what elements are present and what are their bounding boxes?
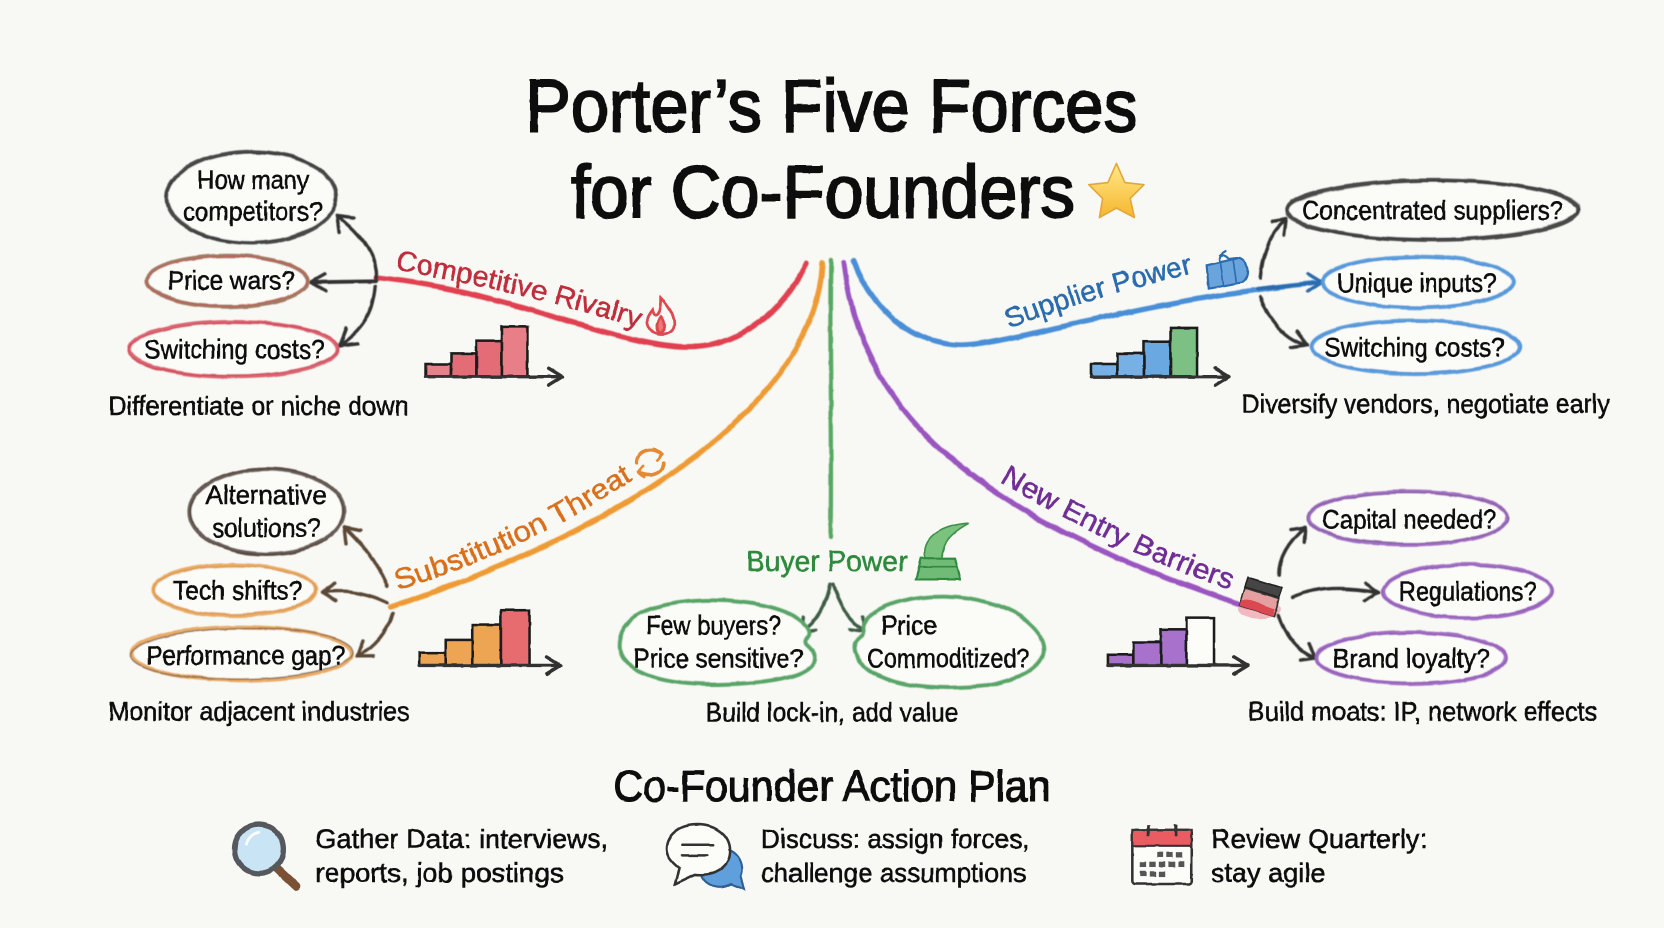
question: alternative solutions — [206, 480, 327, 543]
question: performance gap: Performance gap? — [146, 640, 345, 670]
text: review quarterly: stay agile — [1211, 858, 1325, 888]
title — [525, 65, 1138, 234]
icon: star — [1089, 163, 1144, 218]
oval: tech shifts — [154, 565, 315, 616]
oval: concentrated suppliers — [1286, 179, 1580, 241]
question: switching costs: Switching costs? — [144, 335, 325, 365]
question: alternative solutions: solutions? — [212, 513, 320, 543]
icon: plant tray — [916, 523, 969, 579]
text: review quarterly — [1211, 824, 1427, 888]
force: competitive rivalry — [108, 149, 810, 421]
action: gather data — [235, 824, 608, 888]
question: capital needed: Capital needed? — [1322, 504, 1496, 534]
branch line: buyer — [830, 260, 832, 536]
text: gather data: reports, job postings — [315, 858, 564, 888]
oval: alternative solutions — [188, 469, 345, 554]
question: how many competitors: How many — [197, 165, 309, 195]
branch line: substitution — [391, 263, 822, 607]
question: price wars: Price wars? — [168, 266, 295, 296]
icon: flame — [647, 298, 674, 334]
question: price commoditized: Commoditized? — [867, 644, 1029, 674]
arrows: new entry questions — [1279, 527, 1380, 660]
bar chart: substitution — [419, 610, 560, 674]
question: tech shifts: Tech shifts? — [173, 576, 302, 606]
force: new entry barriers — [840, 259, 1597, 727]
label: substitution threat: Substitution Threat — [395, 466, 634, 589]
question: alternative solutions: Alternative — [206, 480, 327, 510]
branch line: supplier — [854, 261, 1321, 345]
title: Porter’s Five Forces — [525, 65, 1138, 148]
title: for Co-Founders — [571, 151, 1075, 234]
oval: brand loyalty — [1316, 632, 1507, 683]
blob: price commoditized — [855, 596, 1044, 687]
oval: unique inputs — [1321, 257, 1514, 308]
bar chart: supplier — [1091, 328, 1229, 385]
oval: capital needed — [1307, 491, 1509, 544]
force: supplier power — [850, 177, 1611, 419]
advice: buyer: Build lock-in, add value — [706, 698, 958, 728]
oval: switching costs — [128, 321, 339, 378]
advice: substitution: Monitor adjacent industries — [108, 697, 410, 727]
question: how many competitors: competitors? — [183, 197, 323, 227]
question: few buyers: Price sensitive? — [634, 644, 803, 674]
question: few buyers: Few buyers? — [646, 611, 781, 641]
oval: switching costs — [1311, 320, 1521, 374]
text: discuss: challenge assumptions — [761, 858, 1026, 888]
advice: rivalry: Differentiate or niche down — [108, 391, 409, 421]
advice: new entry: Build moats: IP, network effects — [1248, 697, 1597, 727]
arrows: supplier questions — [1260, 220, 1321, 347]
arrows: substitution questions — [322, 527, 393, 656]
oval: regulations — [1383, 565, 1553, 618]
question: few buyers — [634, 611, 803, 674]
icon: magnifier — [235, 825, 296, 886]
text: review quarterly: Review Quarterly: — [1211, 824, 1427, 854]
label: new entry barriers: New Entry Barriers — [1000, 465, 1234, 588]
text: discuss — [761, 824, 1029, 888]
action: discuss — [666, 824, 1029, 889]
blob: few buyers — [620, 600, 814, 684]
question: switching costs: Switching costs? — [1324, 333, 1505, 363]
action plan heading: Co-Founder Action Plan — [613, 763, 1051, 811]
text: gather data: Gather Data: interviews, — [315, 824, 608, 854]
advice: supplier: Diversify vendors, negotiate early — [1242, 389, 1611, 419]
force: buyer power — [620, 260, 1044, 728]
text: gather data — [315, 824, 608, 888]
question: brand loyalty: Brand loyalty? — [1333, 644, 1490, 674]
icon: supplier container — [1207, 250, 1248, 289]
label: buyer power: Buyer Power — [746, 546, 908, 578]
icon: calendar — [1132, 825, 1192, 884]
branch line: rivalry — [377, 263, 807, 347]
oval: performance gap — [130, 626, 354, 681]
label: supplier power: Supplier Power — [1005, 258, 1190, 326]
bar chart: rivalry — [426, 327, 562, 385]
oval: how many competitors — [164, 150, 339, 245]
oval: price wars — [146, 255, 308, 307]
label: competitive rivalry: Competitive Rivalry — [398, 251, 644, 331]
question: unique inputs: Unique inputs? — [1337, 268, 1496, 298]
action: review quarterly — [1132, 824, 1427, 888]
bar chart: new entry — [1108, 618, 1248, 674]
question: concentrated suppliers: Concentrated suppliers? — [1302, 196, 1563, 226]
branch line: new entry — [844, 263, 1247, 607]
question: price commoditized: Price — [881, 611, 937, 641]
arrows: buyer questions — [801, 584, 865, 631]
text: discuss: Discuss: assign forces, — [761, 824, 1029, 854]
question: how many competitors — [183, 165, 323, 227]
icon: refresh arrows — [637, 449, 663, 478]
question: regulations: Regulations? — [1399, 577, 1537, 607]
icon: chat bubbles — [666, 825, 744, 889]
icon: barrier — [1238, 577, 1282, 619]
force: substitution threat — [108, 259, 826, 727]
question: price commoditized — [867, 611, 1029, 674]
arrows: rivalry questions — [311, 215, 377, 345]
